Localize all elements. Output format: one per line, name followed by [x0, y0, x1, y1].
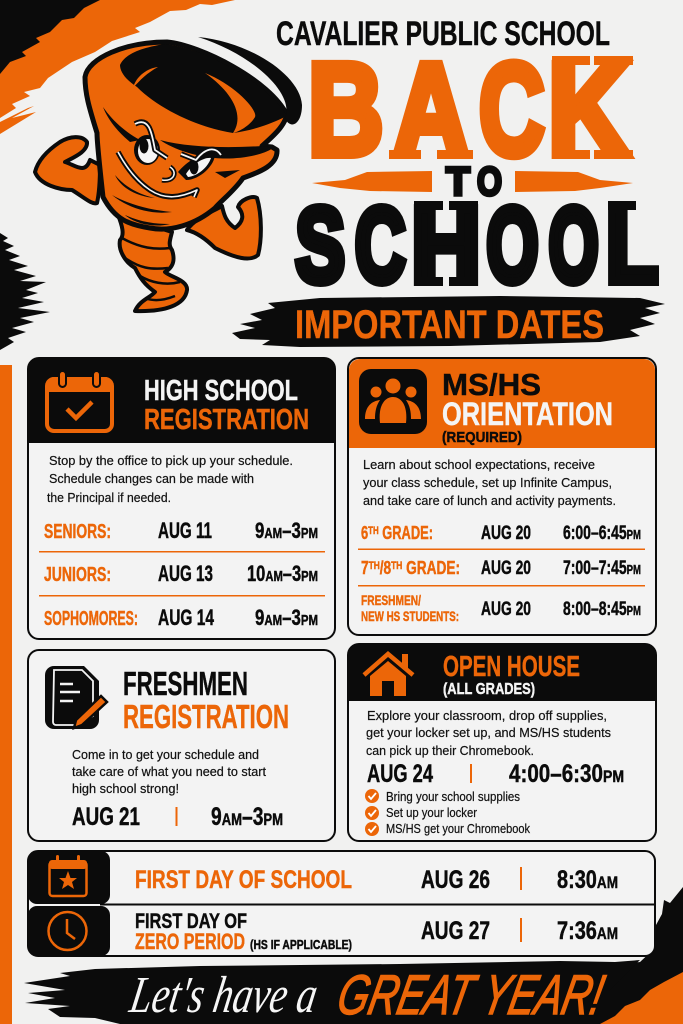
mascot eyes	[134, 122, 221, 180]
description	[47, 454, 293, 505]
schedule rows: SOPHOMORES:	[44, 608, 138, 630]
description	[72, 748, 267, 796]
title: SCHOOL: O	[486, 186, 538, 304]
panel: open house: (ALL GRADES)	[443, 681, 535, 698]
row: first day of school: 8:30AM	[557, 866, 618, 894]
panel: MS/HS orientation: ORIENTATION	[442, 396, 613, 432]
title: BACK: K	[548, 36, 628, 182]
panel: MS/HS orientation: (REQUIRED)	[442, 429, 522, 446]
panel: high school registration	[28, 358, 335, 639]
description: Learn about school expectations, receive	[363, 458, 595, 472]
schedule rows: 8:00–8:45PM	[563, 599, 641, 620]
schedule rows	[39, 518, 325, 630]
panel: freshmen registration	[28, 650, 335, 841]
description: Stop by the office to pick up your schedule.	[49, 454, 293, 468]
title: SCHOOL	[296, 186, 658, 304]
title: BACK: B	[308, 36, 384, 182]
schedule rows: AUG 20	[481, 599, 531, 620]
title: BACK	[308, 36, 633, 182]
heading: MS/HS	[442, 367, 541, 402]
description	[363, 458, 616, 508]
schedule rows	[358, 523, 645, 624]
mascot stripes	[103, 107, 273, 226]
row: first day of zero period: 7:36AM	[557, 917, 618, 945]
schedule rows: 7	[361, 558, 371, 578]
description: your class schedule, set up Infinite Campus,	[363, 476, 612, 490]
description: and take care of lunch and activity payments.	[363, 494, 616, 508]
title: TO with side strokes	[312, 160, 633, 204]
schedule rows: TH	[368, 525, 379, 537]
heading: OPEN HOUSE	[443, 651, 580, 683]
row: first day of school: AUG 26	[421, 866, 490, 894]
title: BACK: C	[479, 36, 544, 182]
panel: high school registration: REGISTRATION	[144, 404, 309, 436]
icon: group of people	[359, 369, 427, 434]
mascot right arm	[187, 197, 261, 259]
schedule rows: NEW HS STUDENTS:	[361, 608, 459, 624]
brush: bottom-right corner	[560, 887, 683, 1024]
header band	[28, 358, 335, 443]
row: first day of zero period: AUG 27	[421, 917, 490, 945]
row: first day of zero period: (HS IF APPLICABLE)	[250, 938, 352, 952]
schedule rows: /8	[380, 558, 391, 578]
schedule rows: GRADE:	[402, 558, 460, 578]
banner: great year	[24, 960, 640, 1024]
row: first day of zero period: ZERO PERIOD	[135, 929, 245, 954]
checklist: Set up your locker	[386, 806, 477, 820]
icon: clock	[28, 906, 110, 956]
schedule rows: 10AM–3PM	[247, 561, 318, 586]
description: take care of what you need to start	[72, 765, 267, 779]
schedule rows: TH	[369, 560, 380, 572]
description: can pick up their Chromebook.	[366, 744, 534, 758]
schedule rows: AUG 14	[158, 605, 215, 630]
schedule rows: GRADE:	[379, 523, 433, 543]
title: SCHOOL: L	[606, 186, 658, 304]
schedule rows: AUG 20	[481, 523, 531, 544]
description: high school strong!	[72, 782, 179, 796]
mascot: cyclone	[35, 37, 302, 311]
description: the Principal if needed.	[47, 491, 171, 505]
mascot inner swirls	[133, 67, 255, 133]
mascot mouth	[120, 44, 287, 133]
schedule rows: 9AM–3PM	[255, 518, 318, 543]
icon: calendar check	[47, 371, 112, 431]
date and time	[72, 803, 283, 831]
description: Schedule changes can be made with	[49, 472, 254, 486]
mascot left arm	[35, 137, 100, 203]
schedule rows: 9AM–3PM	[255, 605, 318, 630]
heading: HIGH SCHOOL	[144, 375, 298, 407]
checklist: MS/HS get your Chromebook	[386, 822, 531, 836]
panel: MS/HS orientation	[348, 358, 656, 635]
mascot tail	[118, 215, 187, 311]
date and time: 9AM–3PM	[211, 803, 283, 831]
title: TO with side strokes: T	[446, 160, 470, 204]
checklist	[365, 789, 531, 836]
title: SCHOOL: O	[549, 186, 599, 304]
schedule rows: TH	[391, 560, 402, 572]
mascot body	[85, 42, 287, 229]
header band	[348, 644, 656, 701]
panel: open house	[348, 644, 656, 841]
icon: calendar star	[28, 851, 110, 904]
header band	[349, 359, 655, 448]
mascot nose and smile	[118, 152, 197, 197]
panel: freshmen registration: REGISTRATION	[123, 698, 289, 735]
schedule rows: AUG 11	[158, 518, 212, 543]
date and time: 4:00–6:30PM	[509, 760, 624, 788]
heading: FRESHMEN	[123, 665, 248, 702]
mascot swoosh	[198, 37, 302, 124]
banner: great year: Let's have a	[125, 966, 322, 1024]
brush: top-left corner	[0, 0, 235, 134]
date and time: AUG 21	[72, 803, 140, 831]
schedule rows: FRESHMEN/	[361, 592, 421, 608]
title: BACK: A	[394, 36, 468, 182]
row: first day of school	[28, 851, 618, 904]
schedule rows: AUG 20	[481, 558, 531, 579]
icon: house	[364, 654, 413, 696]
schedule rows: JUNIORS:	[44, 564, 111, 586]
title: TO with side strokes: O	[477, 160, 502, 204]
schedule rows: SENIORS:	[44, 521, 111, 543]
schedule rows: 6:00–6:45PM	[563, 523, 641, 544]
title: SCHOOL: S	[296, 186, 345, 304]
description: get your locker set up, and MS/HS students	[366, 726, 611, 740]
row: first day of zero period: FIRST DAY OF	[135, 910, 247, 933]
title: SCHOOL: H	[412, 186, 480, 304]
row: first day of school: FIRST DAY OF SCHOOL	[135, 866, 352, 894]
description: Explore your classroom, drop off supplies,	[367, 709, 607, 723]
title: SCHOOL: C	[355, 186, 406, 304]
date and time: AUG 24	[367, 760, 433, 788]
schedule rows: 7:00–7:45PM	[563, 558, 641, 579]
brush: left black spikes	[0, 233, 50, 350]
icon: document and pencil	[45, 666, 107, 729]
checklist: Bring your school supplies	[386, 790, 520, 804]
banner: important dates: IMPORTANT DATES	[295, 303, 604, 347]
schedule rows: 6	[361, 523, 371, 543]
panel: first days strip	[28, 851, 655, 956]
description: Come in to get your schedule and	[72, 748, 259, 762]
date and time	[367, 760, 624, 788]
description	[366, 709, 611, 758]
row: first day of zero period	[28, 906, 618, 956]
left orange bar	[0, 365, 12, 1024]
schedule rows: AUG 13	[158, 561, 213, 586]
